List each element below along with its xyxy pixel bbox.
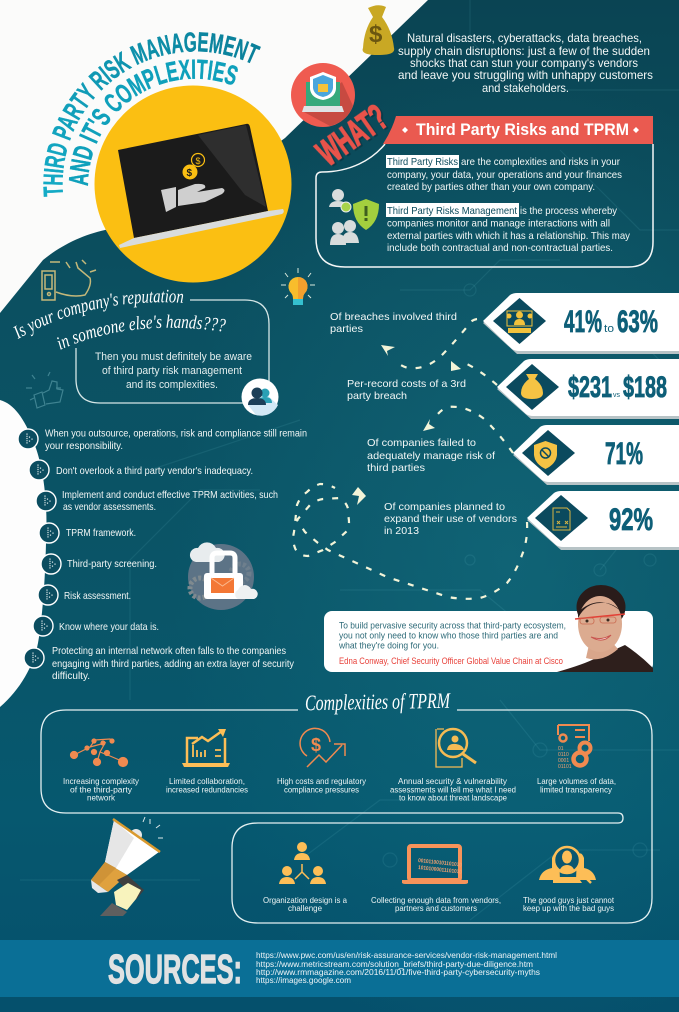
text: expand: in 2013 bbox=[384, 525, 419, 537]
caption 1: of the third-party bbox=[70, 784, 133, 794]
caption 6: Organization design is a bbox=[263, 895, 347, 905]
icon: money bag bbox=[521, 374, 543, 399]
icon: money bag: $ bbox=[369, 21, 383, 48]
text block: definition TPRM: external parties with which it has a relationship. This may bbox=[387, 230, 631, 242]
caption 6: challenge bbox=[288, 903, 322, 913]
text block: definition TPRM: companies monitor and manage interactions with all bbox=[387, 218, 610, 230]
caption 4: Annual security & vulnerability bbox=[398, 776, 508, 786]
bullet 1: your responsibility. bbox=[45, 440, 123, 452]
caption 2 bbox=[166, 776, 248, 794]
quote text: To build pervasive security across that third-party ecosystem, bbox=[339, 620, 566, 632]
bullet 5: Third-party screening. bbox=[67, 558, 157, 570]
banner heading bbox=[383, 116, 653, 144]
text block: Then you must definitely be aware bbox=[95, 351, 252, 363]
bullet 6 bbox=[38, 585, 131, 605]
text: breaches: Of breaches involved third bbox=[330, 311, 457, 323]
sources band bbox=[0, 940, 679, 997]
bullet 2 bbox=[29, 460, 253, 480]
caption 5: limited transparency bbox=[540, 784, 613, 794]
caption 2: increased redundancies bbox=[166, 784, 248, 794]
icon: gears data: 01101 bbox=[558, 764, 572, 770]
caption 3: High costs and regulatory bbox=[277, 776, 367, 786]
text: expand bbox=[384, 501, 517, 537]
arrowheads bbox=[352, 345, 461, 505]
intro text: and stakeholders. bbox=[482, 81, 569, 95]
title: THIRD PARTY RISK MANAGEMENT bbox=[43, 32, 261, 197]
icon: users bbox=[242, 378, 278, 416]
icon: megaphone bbox=[91, 817, 163, 916]
white blob left side bbox=[0, 400, 46, 707]
caption 6 bbox=[263, 895, 347, 913]
stat: breaches: to bbox=[604, 323, 614, 335]
caption 1 bbox=[63, 776, 140, 802]
stat: per-record cost: vs bbox=[613, 392, 620, 399]
bullet 4: TPRM framework. bbox=[66, 527, 136, 539]
text block: and its complexities. bbox=[126, 379, 218, 391]
text: breaches: parties bbox=[330, 323, 363, 335]
yellow circle with laptop bbox=[94, 86, 292, 282]
text block: definition risks: are the complexities and risks in your bbox=[461, 156, 620, 168]
intro text: supply chain disruptions: just a few of the sudden bbox=[398, 44, 650, 58]
icon: magnifier report bbox=[436, 729, 476, 767]
sources heading: SOURCES: bbox=[108, 946, 242, 992]
stat: per-record cost: $231 bbox=[568, 371, 612, 404]
caption 2: Limited collaboration, bbox=[169, 776, 245, 786]
icon: plan document bbox=[553, 508, 570, 530]
source list bbox=[256, 950, 557, 985]
text: per-record bbox=[347, 378, 466, 402]
icon: red circle security laptop bbox=[291, 63, 355, 127]
text block: definition risks: created by parties other than your own company. bbox=[387, 181, 595, 193]
icon: gears data bbox=[558, 725, 590, 770]
caption 1: Increasing complexity bbox=[63, 776, 140, 786]
text: expand: Of companies planned to bbox=[384, 501, 505, 513]
stat: per-record cost bbox=[497, 359, 679, 419]
icon: gears data: 01 bbox=[558, 746, 564, 752]
text block: definition TPRM: include both contractual and non-contractual parties. bbox=[387, 242, 613, 254]
source list: http://www.rmmagazine.com/2016/11/01/five-third-party-cybersecurity-myths bbox=[256, 967, 540, 977]
bullet 3: as vendor assessments. bbox=[63, 501, 156, 513]
stat: failed to manage: 71% bbox=[605, 435, 643, 471]
stat: breaches: 41% bbox=[564, 303, 602, 339]
script heading: in someone else's hands??? bbox=[57, 314, 226, 350]
white background top left bbox=[0, 0, 428, 313]
stat: breaches: 63% bbox=[617, 303, 658, 339]
portrait bbox=[557, 585, 653, 672]
laptop screen bbox=[118, 124, 284, 248]
bullet list bbox=[18, 428, 307, 682]
icon: network bbox=[70, 739, 128, 766]
caption 3: compliance pressures bbox=[284, 784, 359, 794]
bullet 1 bbox=[18, 428, 307, 452]
caption 7 bbox=[371, 895, 501, 913]
laptop screen: $ bbox=[196, 156, 201, 166]
dashed arrows bbox=[293, 319, 527, 599]
title: AND IT'S COMPLEXITIES bbox=[68, 59, 238, 186]
icon: faint thumbs up bbox=[26, 372, 63, 408]
bullet 8 bbox=[24, 645, 295, 682]
icon: dollar arrow bbox=[300, 728, 345, 767]
icon: gears data: 0110 bbox=[558, 752, 569, 758]
text: per-record: Per-record costs of a 3rd bbox=[347, 378, 466, 390]
panel: third party risks and TPRM bbox=[316, 116, 653, 267]
icon: searching people bbox=[539, 847, 596, 883]
text block bbox=[95, 351, 252, 391]
text block: definition risks: company, your data, your operations and your finances bbox=[387, 169, 622, 181]
panel: reputation callout bbox=[13, 290, 278, 416]
heading: complexities of TPRM: Complexities of TPRM bbox=[305, 688, 451, 715]
icon: org design bbox=[279, 842, 326, 884]
text block: definition risks bbox=[386, 155, 622, 193]
intro text bbox=[398, 31, 653, 95]
icon: light bulb bbox=[281, 268, 315, 305]
icon: laptop data bbox=[402, 846, 468, 884]
stat: breaches bbox=[483, 293, 679, 354]
icon: gears data: 0001 bbox=[558, 758, 569, 764]
text block: definition TPRM: Third Party Risks Management bbox=[387, 205, 517, 217]
caption 5 bbox=[537, 776, 616, 794]
bullet 6: Risk assessment. bbox=[64, 590, 131, 602]
text: breaches bbox=[330, 311, 457, 335]
icon: laptop data: 10101000011101010 bbox=[418, 865, 462, 876]
caption 8: keep up with the bad guys bbox=[523, 903, 614, 913]
icon: people and shield bbox=[329, 189, 379, 245]
text: expand: expand their use of vendors bbox=[384, 513, 517, 525]
icon: presenter bbox=[506, 311, 532, 333]
caption 7: Collecting enough data from vendors, bbox=[371, 895, 501, 905]
bullet 8: Protecting an internal network often falls to the companies bbox=[52, 645, 286, 657]
icon: money bag bbox=[363, 5, 394, 55]
text: failed: adequately manage risk of bbox=[367, 450, 495, 462]
text block: definition risks: Third Party Risks bbox=[387, 156, 458, 168]
stat: expand vendors: 92% bbox=[609, 501, 653, 537]
panel: complexities bbox=[41, 710, 652, 923]
icon: laptop data: 00101100101101010 bbox=[418, 858, 462, 869]
caption 1: network bbox=[87, 792, 116, 802]
quote text: what they're doing for you. bbox=[338, 640, 439, 652]
caption 4 bbox=[390, 776, 516, 802]
caption 8 bbox=[523, 895, 615, 913]
banner heading: Third Party Risks and TPRM bbox=[416, 120, 629, 139]
bullet 3 bbox=[36, 489, 278, 513]
stat: expand vendors bbox=[527, 491, 679, 550]
text block: of third party risk management bbox=[102, 365, 242, 377]
laptop screen: $ bbox=[186, 168, 192, 179]
text block: definition TPRM bbox=[386, 203, 631, 254]
script heading bbox=[13, 290, 226, 350]
icon: shield bbox=[534, 441, 557, 469]
intro text: shocks that can stun your company's vendors bbox=[410, 56, 638, 70]
icon: laptop chart bbox=[182, 729, 230, 767]
icon: dollar arrow: $ bbox=[311, 735, 321, 755]
caption 5: Large volumes of data, bbox=[537, 776, 616, 786]
text: per-record: party breach bbox=[347, 390, 407, 402]
stat: failed to manage bbox=[513, 425, 679, 485]
bullet 5 bbox=[41, 554, 157, 574]
source list: https://images.google.com bbox=[256, 975, 351, 985]
bullet 7 bbox=[33, 616, 159, 636]
caption 4: assessments will tell me what I need bbox=[390, 784, 516, 794]
caption 4: to know about threat landscape bbox=[399, 792, 507, 802]
bullet 8: difficulty. bbox=[52, 670, 90, 682]
caption 7: partners and customers bbox=[395, 903, 477, 913]
quote text: you not only need to know who those third parties are and bbox=[339, 630, 558, 642]
bullet 8: engaging with third parties, adding an extra layer of security bbox=[52, 658, 295, 670]
bullet 3: Implement and conduct effective TPRM activities, such bbox=[62, 489, 278, 501]
source list: https://www.pwc.com/us/en/risk-assurance-services/vendor-risk-management.html bbox=[256, 950, 557, 960]
bullet 2: Don't overlook a third party vendor's inadequacy. bbox=[56, 465, 253, 477]
caption 8: The good guys just cannot bbox=[523, 895, 615, 905]
bullet 1: When you outsource, operations, risk and compliance still remain bbox=[45, 428, 307, 440]
bullet 7: Know where your data is. bbox=[59, 621, 159, 633]
script heading: Is your company's reputation bbox=[13, 290, 184, 339]
heading: WHAT?: WHAT? bbox=[309, 96, 395, 174]
text: failed bbox=[367, 437, 495, 474]
icon: thumbs up outline bbox=[42, 260, 96, 300]
intro text: and leave you struggling with unhappy customers bbox=[398, 68, 653, 82]
icon: cloud lock bbox=[188, 542, 258, 610]
bullet 4 bbox=[39, 523, 136, 543]
intro text: Natural disasters, cyberattacks, data breaches, bbox=[407, 31, 642, 45]
text block: definition TPRM: is the process whereby bbox=[520, 205, 618, 217]
text: failed: Of companies failed to bbox=[367, 437, 476, 449]
source list: https://www.metricstream.com/solution_briefs/third-party-due-diligence.htm bbox=[256, 959, 533, 969]
caption 3 bbox=[277, 776, 367, 794]
quote panel bbox=[324, 585, 653, 672]
quote text bbox=[338, 620, 566, 652]
quote attribution: Edna Conway, Chief Security Officer Global Value Chain at Cisco bbox=[339, 656, 563, 667]
text: failed: third parties bbox=[367, 462, 425, 474]
